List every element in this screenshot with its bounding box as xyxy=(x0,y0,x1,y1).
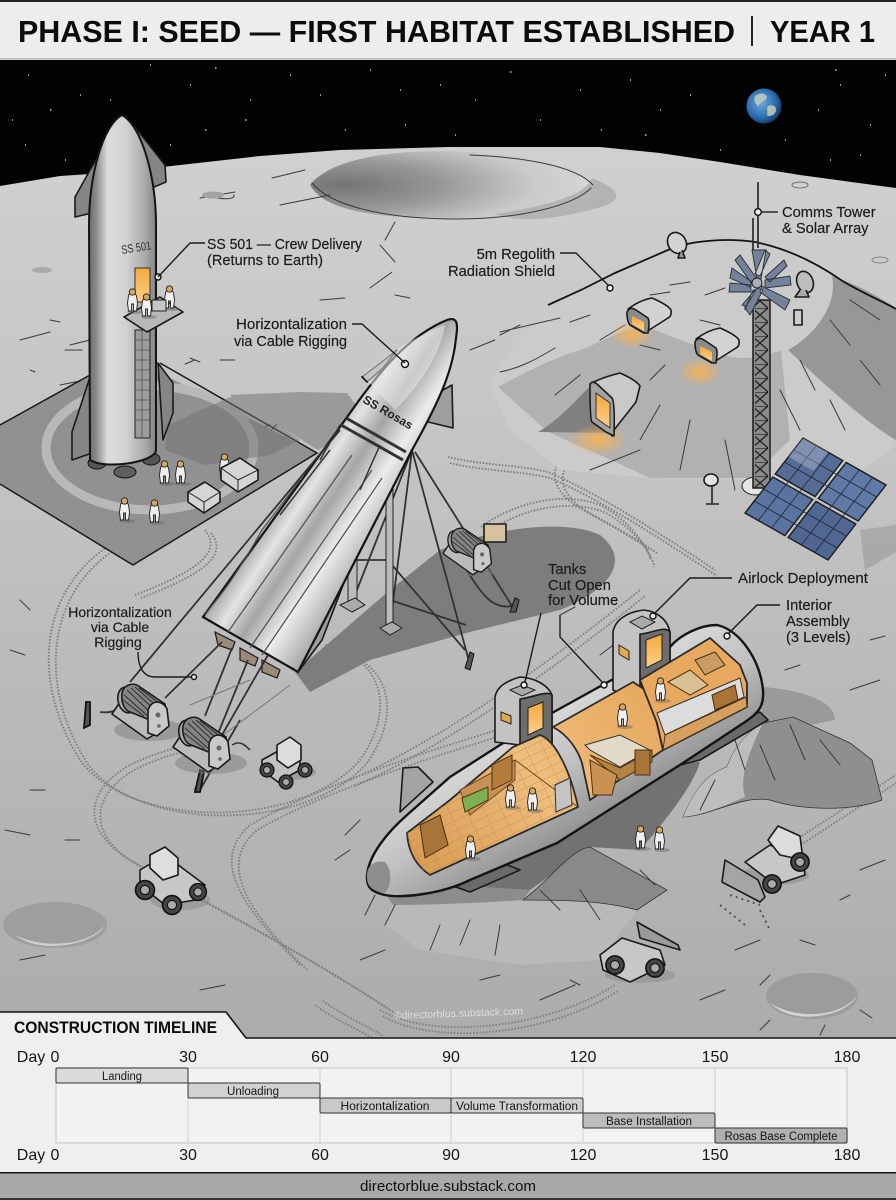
bar: base installation xyxy=(583,1113,715,1128)
label: airlock: Airlock Deployment xyxy=(738,571,868,587)
lunar surface xyxy=(0,147,896,1040)
engines xyxy=(215,632,280,678)
top axis: 150 xyxy=(702,1049,728,1066)
bar: base installation: Base Installation xyxy=(606,1116,692,1128)
label: SS 501: (Returns to Earth) xyxy=(207,253,323,269)
bottom axis: 90 xyxy=(442,1147,460,1164)
label: comms tower: & Solar Array xyxy=(782,221,869,237)
regolith hill with shield xyxy=(490,240,896,490)
label: horizontalization left: Horizontalization xyxy=(68,604,172,620)
astronauts outside habitat xyxy=(635,826,670,852)
bar: horizontalization xyxy=(320,1098,451,1113)
surface cracks xyxy=(5,182,888,1000)
top axis xyxy=(17,1049,860,1066)
top axis: 60 xyxy=(311,1049,329,1066)
bottom axis: Day xyxy=(17,1147,45,1164)
airlock 2 xyxy=(613,610,670,700)
landing pad xyxy=(0,355,368,565)
bulldozer xyxy=(720,826,809,930)
hull xyxy=(367,625,763,896)
satellite dishes and sensor xyxy=(664,229,816,504)
label: interior assembly: (3 Levels) xyxy=(786,630,850,646)
solar panel array xyxy=(745,438,896,570)
bottom axis: 30 xyxy=(179,1147,197,1164)
top axis: 0 xyxy=(51,1049,60,1066)
label: interior assembly: Interior xyxy=(786,598,832,614)
header xyxy=(0,0,896,60)
airlock 1 xyxy=(495,677,552,745)
bar: horizontalization: Horizontalization xyxy=(340,1101,430,1113)
ship name: SS Rosas xyxy=(360,392,416,432)
bar: unloading: Unloading xyxy=(227,1086,279,1098)
comms tower and wind-shaped solar array xyxy=(729,182,791,495)
icon: Earth xyxy=(746,88,782,124)
label: tanks cut open: for Volume xyxy=(548,593,618,609)
habitat ship cutaway xyxy=(367,610,768,896)
bar: rosas base complete: Rosas Base Complete xyxy=(724,1131,838,1143)
label: horizontalization top: Horizontalization xyxy=(236,317,347,333)
winch 2 xyxy=(173,717,247,774)
large crater xyxy=(272,151,616,240)
label: horizontalization left: via Cable xyxy=(91,619,149,635)
small rover xyxy=(232,737,316,789)
bar: landing xyxy=(56,1068,188,1083)
top axis: 30 xyxy=(179,1049,197,1066)
timeline heading: CONSTRUCTION TIMELINE xyxy=(14,1019,217,1037)
bottom axis xyxy=(17,1147,860,1164)
construction timeline panel xyxy=(0,1012,896,1173)
small crater bottom right xyxy=(760,973,872,1035)
title: PHASE I: SEED — FIRST HABITAT ESTABLISHED xyxy=(18,14,735,49)
label: comms tower: Comms Tower xyxy=(782,205,876,221)
winch 1 xyxy=(112,684,186,741)
year: YEAR 1 xyxy=(770,14,875,49)
shadow of tilted rocket xyxy=(295,527,615,692)
section 3: quarters xyxy=(640,638,747,750)
bar: landing: Landing xyxy=(102,1071,142,1083)
label: tanks cut open: Cut Open xyxy=(548,578,611,594)
bar: unloading xyxy=(188,1083,320,1098)
label: tanks cut open: Tanks xyxy=(548,562,586,578)
label: SS 501: SS 501 — Crew Delivery xyxy=(207,237,363,253)
rover tracks xyxy=(49,437,896,1040)
tractor xyxy=(136,847,210,914)
bar: volume transformation: Volume Transformation xyxy=(456,1101,578,1113)
space sky with stars xyxy=(0,59,896,199)
top axis: 180 xyxy=(834,1049,860,1066)
label: interior assembly: Assembly xyxy=(786,614,850,630)
top axis: Day xyxy=(17,1049,45,1066)
label: regolith shield: Radiation Shield xyxy=(448,264,555,280)
bottom axis: 0 xyxy=(51,1147,60,1164)
ship name: SS 501 xyxy=(120,238,152,257)
label: horizontalization left: Rigging xyxy=(94,634,142,650)
watermark: ©directorblus.substack.com xyxy=(394,1005,523,1022)
dirt mounds around habitat xyxy=(335,687,882,965)
top axis: 120 xyxy=(570,1049,596,1066)
label: horizontalization top: via Cable Rigging xyxy=(234,334,347,350)
crew platform xyxy=(124,286,183,332)
front loader rover xyxy=(600,922,680,983)
small crater bottom left xyxy=(3,902,107,948)
bottom axis: 120 xyxy=(570,1147,596,1164)
rocket SS 501 xyxy=(72,115,183,478)
chart grid xyxy=(56,1068,847,1143)
label: regolith shield: 5m Regolith xyxy=(477,247,555,263)
bottom axis: 180 xyxy=(834,1147,860,1164)
bottom axis: 60 xyxy=(311,1147,329,1164)
section 2: lab xyxy=(553,682,663,800)
leader lines xyxy=(138,212,780,683)
bottom axis: 150 xyxy=(702,1147,728,1164)
pad crew and cargo xyxy=(119,454,258,525)
top axis: 90 xyxy=(442,1049,460,1066)
shield doors with orange glow xyxy=(568,298,739,456)
horizontalization cables xyxy=(84,430,340,792)
footer xyxy=(0,1172,896,1200)
winch top right with tripod rigging xyxy=(340,450,519,670)
bar: rosas base complete xyxy=(715,1128,847,1143)
footer: directorblue.substack.com xyxy=(360,1178,536,1195)
tilted rocket SS Rosas xyxy=(203,319,457,678)
section 1: greenhouse xyxy=(407,735,578,875)
